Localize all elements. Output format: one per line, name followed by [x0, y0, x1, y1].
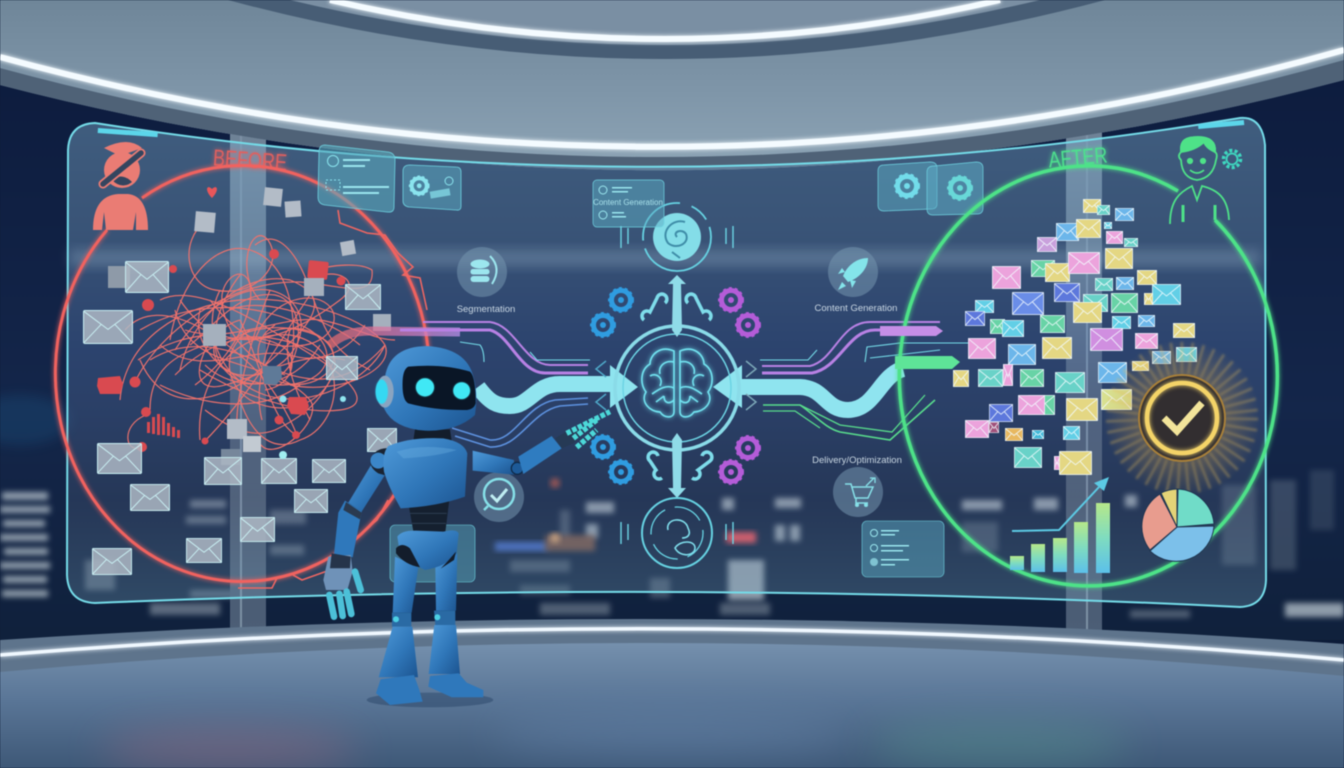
- pink purple band left: [330, 331, 460, 345]
- jagged red circuit lines: [238, 210, 427, 588]
- grey message cubes: [108, 187, 391, 465]
- green lines right: [763, 400, 935, 440]
- right arm: [473, 412, 610, 475]
- glowing eyes: [416, 378, 434, 396]
- icon: top spiral node: [621, 203, 733, 271]
- robot character: [323, 346, 610, 707]
- icon: success badge: [1104, 340, 1260, 496]
- blue lines left: [452, 398, 588, 440]
- head: [376, 346, 476, 431]
- floor light strip: [0, 629, 1344, 660]
- card: content generation: Content Generation: [593, 198, 663, 207]
- green band arrow: [895, 356, 960, 369]
- waist and hips: [396, 500, 459, 570]
- orderly green circle: [899, 166, 1277, 586]
- pale envelopes: [84, 261, 397, 575]
- ear light: [376, 376, 394, 408]
- step: content generation with rocket: [815, 247, 897, 314]
- icon: happy person: [1170, 137, 1240, 224]
- step: segmentation: [457, 247, 515, 315]
- purple lines left: [423, 322, 588, 365]
- purple lines right: [762, 322, 940, 366]
- step: delivery optimization with cart: Delivery/Optimization: [812, 455, 902, 466]
- holographic glass panel: [67, 118, 1266, 607]
- floor: [0, 619, 1344, 768]
- info cards upper left: [318, 145, 461, 212]
- feet: [376, 675, 423, 705]
- torso: [370, 429, 467, 508]
- legs: [376, 553, 483, 705]
- ceiling light ring upper: [330, 0, 1000, 39]
- cyan connector squiggles: [642, 294, 712, 479]
- background: night sky window: [0, 60, 1344, 640]
- ceiling: [0, 0, 1344, 170]
- step: verification check: [474, 472, 524, 522]
- panel: after: [880, 137, 1277, 586]
- visor: [403, 366, 476, 410]
- floor shadow: [367, 693, 493, 707]
- red error fragments and bar glyph: [97, 249, 346, 452]
- arrow down: [668, 433, 686, 498]
- card: lower centre behind robot: [390, 525, 475, 582]
- arrow heads into AI core: [610, 365, 742, 408]
- horizontal reflection band: [70, 250, 1260, 266]
- card: content generation: [593, 180, 664, 227]
- big arrow left shaft: [478, 384, 614, 406]
- big arrow right shaft: [740, 369, 903, 410]
- bar chart: [1010, 503, 1110, 573]
- purple band arrow: [880, 326, 943, 336]
- icon: brain: [642, 349, 712, 417]
- chaotic red circle: [55, 166, 429, 582]
- icon: gear: [1224, 150, 1240, 168]
- left arm: [323, 464, 386, 617]
- icon: bottom node: [621, 498, 733, 568]
- before heading: BEFORE: [212, 144, 288, 176]
- growth arrow: [1012, 477, 1109, 531]
- step: segmentation: Segmentation: [457, 304, 515, 315]
- card: settings: [403, 165, 461, 210]
- step: delivery optimization with cart: [812, 455, 902, 517]
- panel: AI core: [591, 203, 760, 568]
- card: analytics summary: [318, 145, 395, 212]
- flow lines to AI core: [330, 322, 968, 447]
- icon: heart: [207, 187, 217, 198]
- gear cards upper right: [878, 162, 983, 215]
- tangled red scribble: [120, 222, 395, 449]
- card: delivery details: [862, 521, 944, 577]
- ceiling light ring lower: [0, 50, 1344, 147]
- pie chart: [1142, 489, 1214, 561]
- after heading: AFTER: [1047, 142, 1108, 173]
- icon: unhappy person: [93, 142, 148, 230]
- background: blurred city lights: [0, 395, 1344, 618]
- core rings: [615, 326, 739, 450]
- chevrons: [596, 361, 606, 410]
- organised coloured envelopes: [953, 199, 1197, 475]
- window pillars: [230, 100, 1102, 630]
- arrow up: [668, 275, 686, 337]
- panel: before: [55, 142, 429, 588]
- cyan thin lines left: [460, 342, 590, 362]
- blue and purple target dots: [591, 288, 760, 484]
- step: content generation with rocket: Content Generation: [815, 303, 897, 314]
